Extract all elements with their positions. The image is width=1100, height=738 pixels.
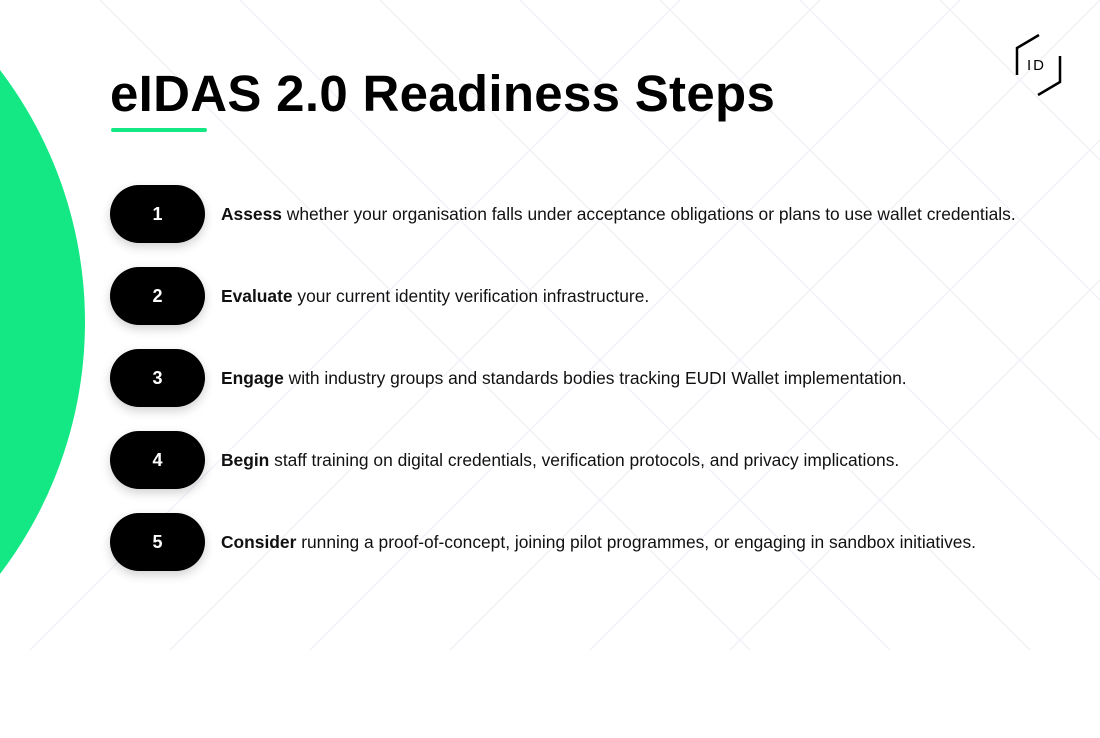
- step 1: 1: [152, 204, 162, 224]
- step 3: Engage with industry groups and standards bodies tracking EUDI Wallet implementation.: [221, 368, 907, 388]
- step 1: [106, 185, 1016, 251]
- step 5: [106, 513, 976, 579]
- step 2: [106, 267, 649, 333]
- title: eIDAS 2.0 Readiness Steps: [110, 65, 775, 122]
- step 4: 4: [152, 450, 162, 470]
- title underline: [111, 128, 207, 132]
- icon: ID logo: [1016, 34, 1062, 96]
- step 2: 2: [152, 286, 162, 306]
- step 1: Assess whether your organisation falls under acceptance obligations or plans to use wallet credentials.: [221, 204, 1016, 224]
- step 3: [106, 349, 907, 415]
- step 3: 3: [152, 368, 162, 388]
- step 4: Begin staff training on digital credentials, verification protocols, and privacy implications.: [221, 450, 899, 470]
- icon: ID logo: ID: [1027, 57, 1046, 74]
- step 4: [106, 431, 899, 497]
- step 5: 5: [152, 532, 162, 552]
- decorative green circle: [0, 0, 85, 738]
- step 5: Consider running a proof-of-concept, joining pilot programmes, or engaging in sandbox initiatives.: [221, 532, 976, 552]
- step 2: Evaluate your current identity verification infrastructure.: [221, 286, 649, 306]
